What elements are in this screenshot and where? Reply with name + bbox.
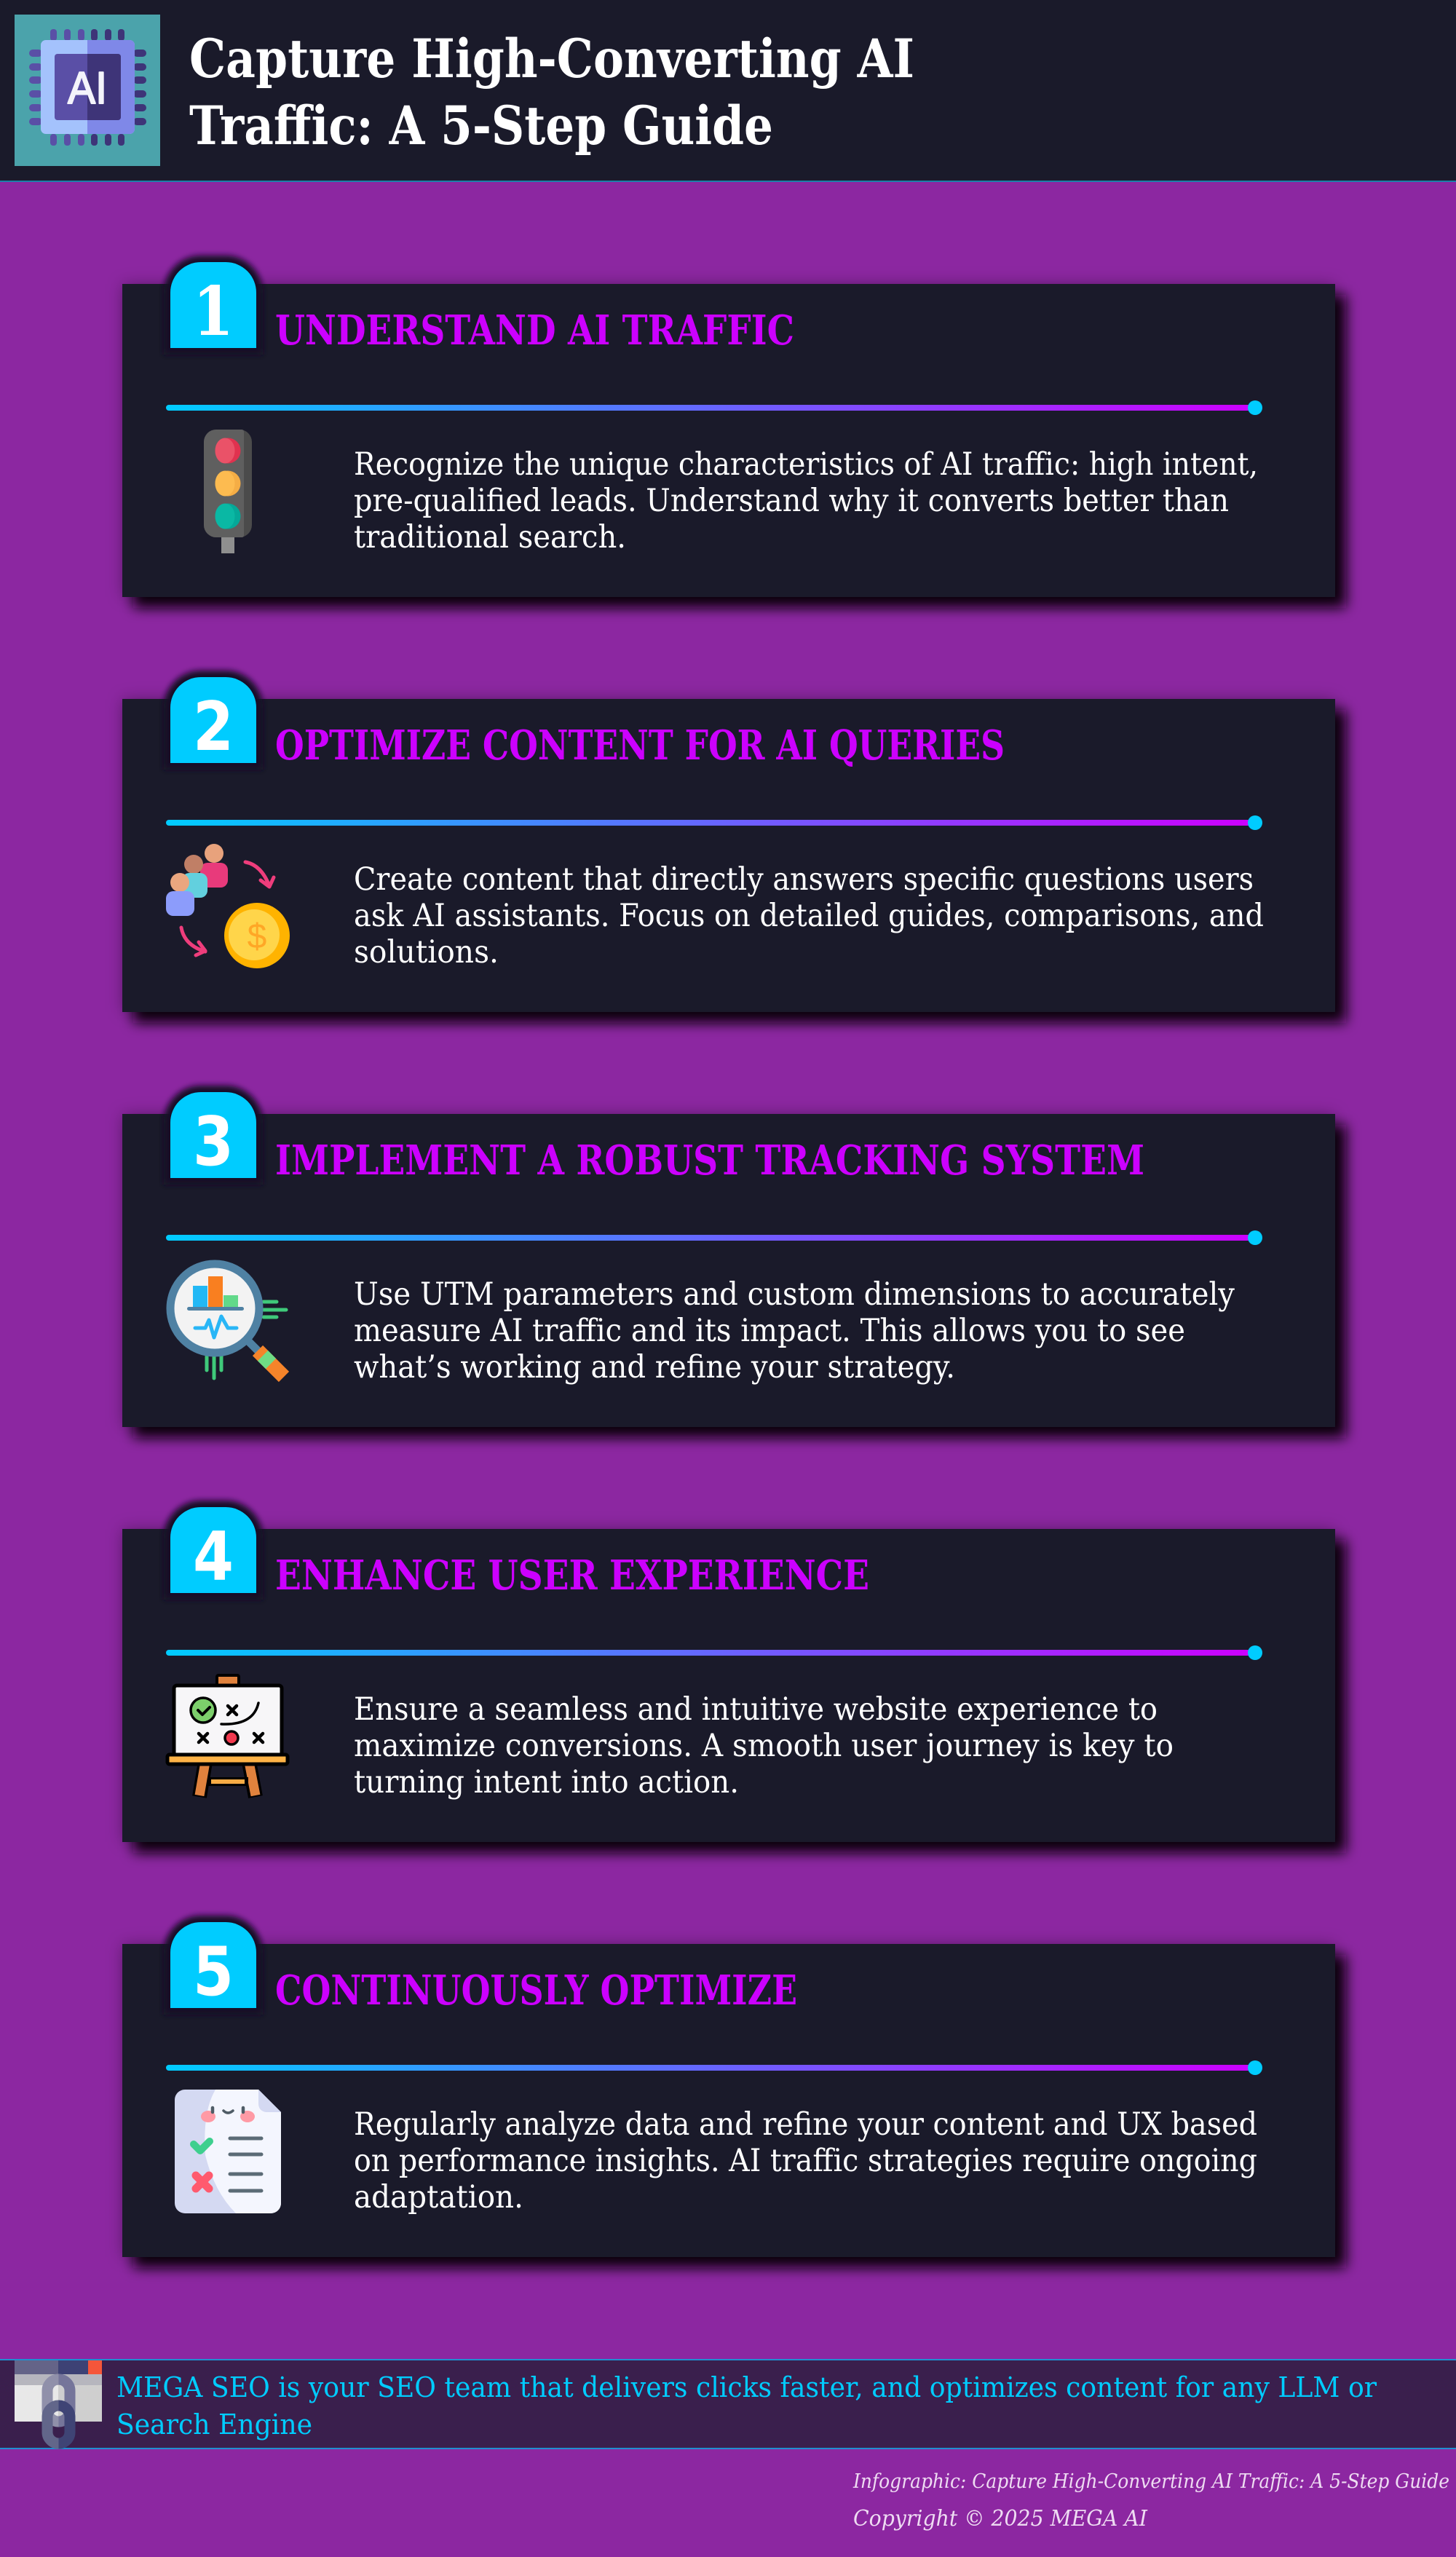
icon: magnifier with chart (170, 1264, 286, 1378)
body text: turning intent into action. (354, 1764, 739, 1801)
divider line with dot (166, 400, 1262, 415)
title: Traffic: A 5-Step Guide (189, 95, 773, 157)
promo text: Search Engine (116, 2408, 312, 2441)
step heading: UNDERSTAND AI TRAFFIC (275, 307, 794, 355)
step heading: ENHANCE USER EXPERIENCE (275, 1552, 869, 1600)
icon: AI chip logo (15, 15, 160, 166)
body text: Use UTM parameters and custom dimensions to accurately (354, 1276, 1235, 1313)
footer credits (852, 2470, 1449, 2532)
number badge 1 (170, 262, 256, 351)
number badge 5 (170, 1922, 256, 2011)
body text: Recognize the unique characteristics of AI traffic: high intent, (354, 446, 1258, 483)
panel: step 5 continuously optimize (122, 1922, 1346, 2268)
icon: browser with link (15, 2360, 102, 2443)
icon: easel strategy board (167, 1675, 288, 1797)
footer credits: Copyright © 2025 MEGA AI (853, 2506, 1148, 2532)
promo text: MEGA SEO is your SEO team that delivers clicks faster, and optimizes content for any LLM or (116, 2371, 1377, 2403)
body text: measure AI traffic and its impact. This allows you to see (354, 1313, 1185, 1349)
number badge 4: 4 (193, 1517, 234, 1596)
body text (354, 2106, 1257, 2216)
body text: Ensure a seamless and intuitive website experience to (354, 1691, 1158, 1728)
header (0, 0, 1456, 182)
divider line with dot (166, 815, 1262, 830)
title: Capture High-Converting AI (189, 28, 914, 90)
divider line with dot (166, 2060, 1262, 2075)
icon: AI chip logo: AI (68, 63, 107, 114)
body text: adaptation. (354, 2179, 523, 2216)
body text: pre-qualified leads. Understand why it converts better than (354, 483, 1229, 519)
divider line with dot (166, 1230, 1262, 1245)
icon: people to money (166, 844, 290, 968)
body text: solutions. (354, 934, 499, 971)
icon: checklist document (175, 2090, 281, 2213)
number badge 2 (170, 677, 256, 766)
body text (354, 1691, 1174, 1801)
panel: promo band (0, 2359, 1456, 2449)
step heading: IMPLEMENT A ROBUST TRACKING SYSTEM (275, 1137, 1144, 1185)
number badge 1: 1 (193, 272, 234, 351)
body text: Create content that directly answers specific questions users (354, 861, 1254, 898)
body text: ask AI assistants. Focus on detailed guides, comparisons, and (354, 898, 1264, 934)
number badge 3: 3 (193, 1102, 234, 1181)
panel: step 4 user experience (122, 1507, 1346, 1853)
divider line with dot (166, 1645, 1262, 1660)
body text: what’s working and refine your strategy. (354, 1349, 955, 1386)
number badge 5: 5 (193, 1932, 234, 2011)
body text: on performance insights. AI traffic strategies require ongoing (354, 2143, 1257, 2179)
icon: traffic light (204, 430, 252, 553)
panel: step 3 tracking system (122, 1092, 1346, 1438)
body text: maximize conversions. A smooth user journey is key to (354, 1728, 1174, 1764)
body text: traditional search. (354, 519, 626, 556)
number badge 3 (170, 1092, 256, 1181)
body text (354, 861, 1264, 971)
title (189, 28, 914, 157)
panel: step 2 optimize content (122, 677, 1346, 1023)
body text (354, 1276, 1235, 1386)
number badge 4 (170, 1507, 256, 1596)
panel: step 1 understand AI traffic (122, 262, 1346, 608)
body text: Regularly analyze data and refine your content and UX based (354, 2106, 1257, 2143)
step heading: CONTINUOUSLY OPTIMIZE (275, 1967, 797, 2015)
promo text (116, 2371, 1377, 2441)
step heading: OPTIMIZE CONTENT FOR AI QUERIES (275, 722, 1005, 770)
number badge 2: 2 (193, 687, 234, 766)
icon: people to money: $ (248, 917, 266, 956)
body text (354, 446, 1258, 556)
